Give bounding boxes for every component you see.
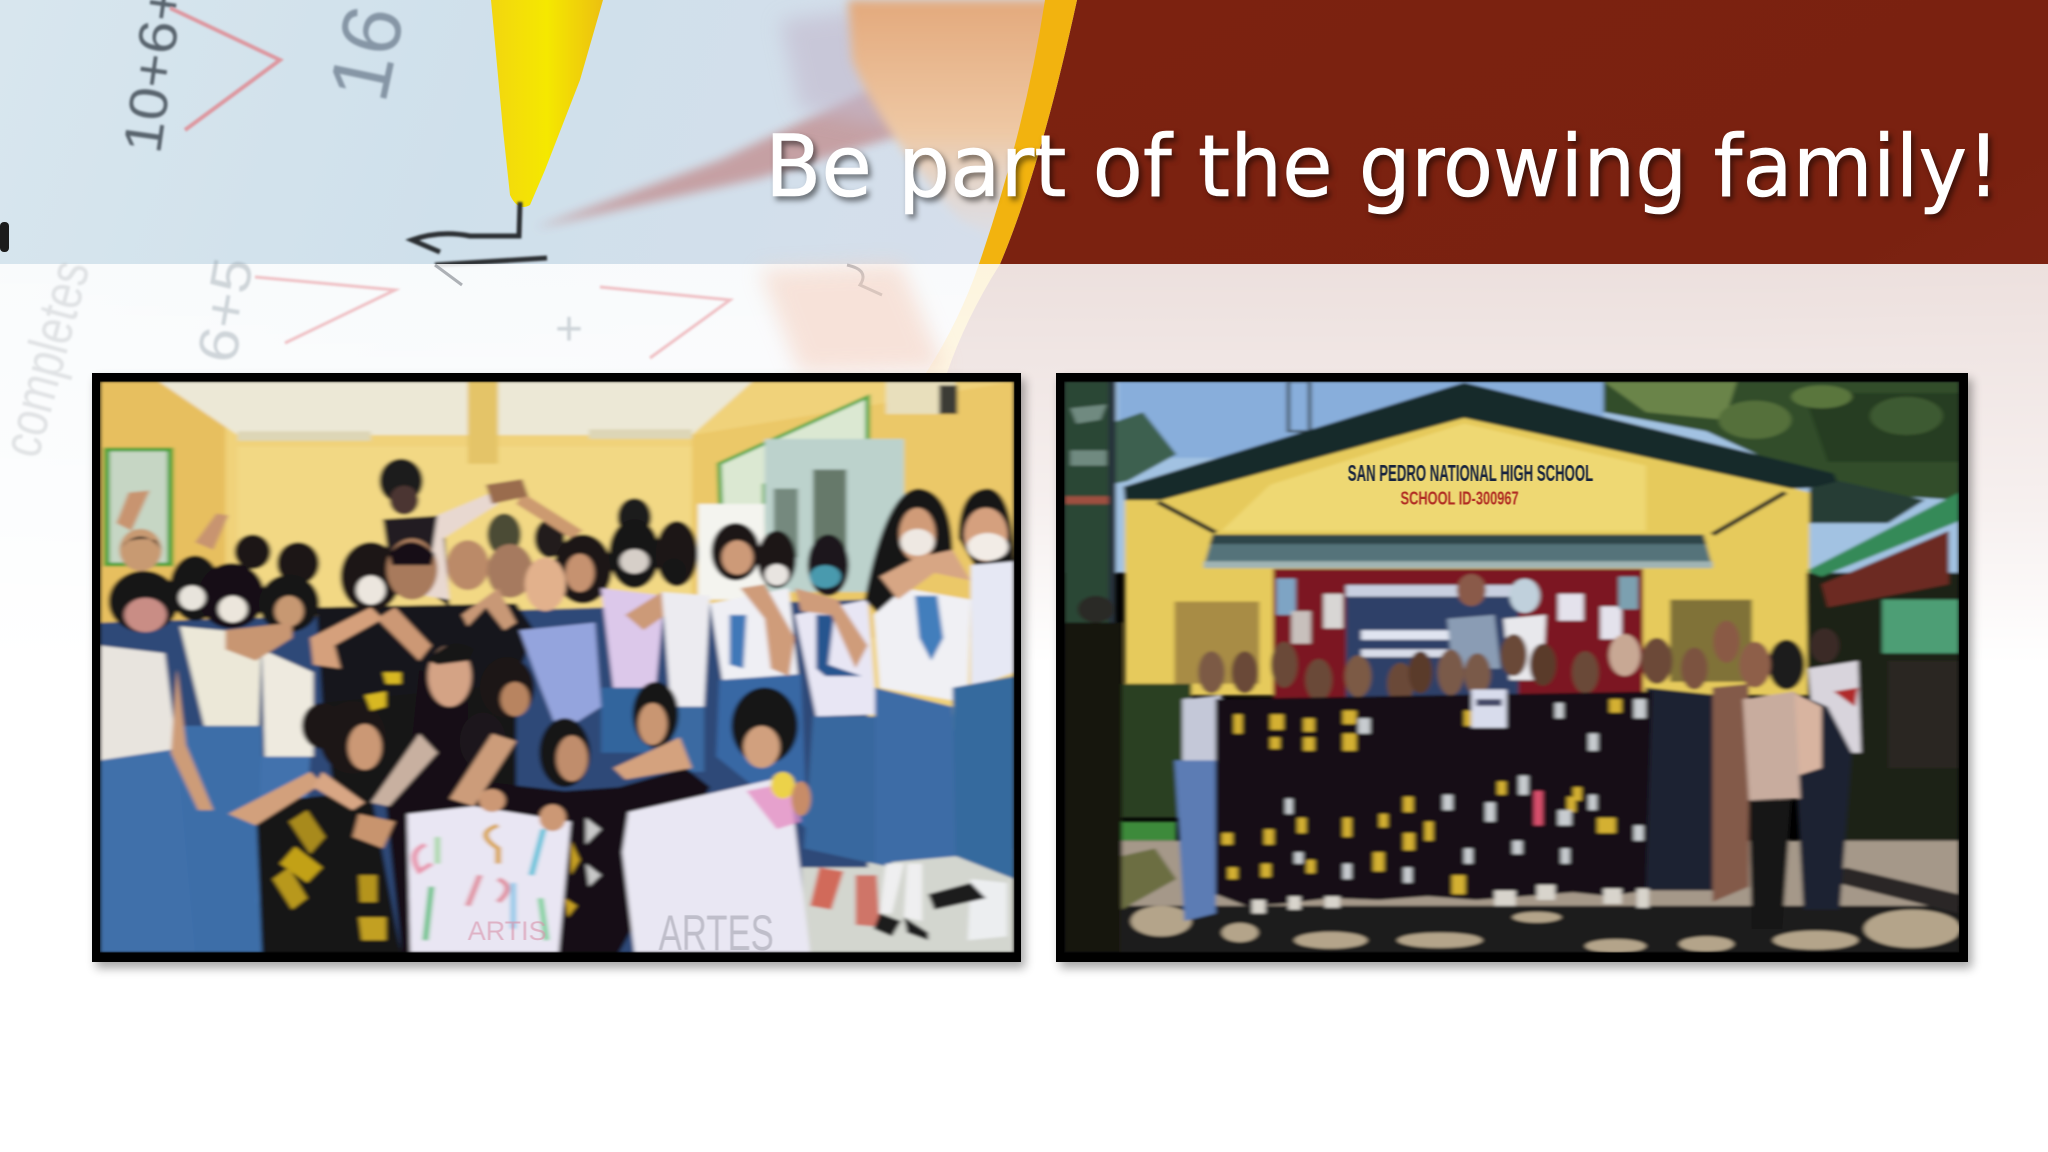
costume patches bbox=[1222, 699, 1622, 894]
back row heads bbox=[379, 459, 423, 503]
right girl bbox=[959, 489, 1014, 569]
faded lower marks bbox=[0, 253, 583, 463]
photo: school building with students in front: SAN PEDRO NATIONAL HIGH SCHOOL bbox=[1348, 461, 1593, 486]
photo: students making heart signs in a classroom bbox=[100, 381, 1014, 960]
crowd base fill bbox=[100, 600, 868, 952]
poster left bbox=[407, 806, 571, 952]
white fade overlay bbox=[0, 264, 2048, 664]
blue mask girl bbox=[808, 535, 849, 596]
arms bbox=[228, 772, 322, 825]
faded lower marks: + bbox=[555, 303, 583, 356]
finger bbox=[848, 0, 1060, 240]
worksheet marks: 16 bbox=[311, 0, 422, 109]
worksheet marks bbox=[112, 0, 422, 157]
banner bbox=[1346, 585, 1519, 700]
red stage wall bbox=[1273, 569, 1643, 699]
faded finger bbox=[760, 264, 945, 373]
white shirt tie mask bbox=[656, 521, 698, 586]
poster left lettering: ARTIS bbox=[468, 916, 547, 946]
background figures on stage bbox=[1457, 574, 1486, 606]
photo frame right bbox=[1056, 373, 1968, 962]
left window bbox=[107, 450, 170, 564]
air conditioner bbox=[886, 381, 956, 414]
photo frame shadow left bbox=[96, 379, 1025, 968]
photo: students making heart signs in a classroom: ARTES bbox=[659, 904, 774, 960]
ceiling bbox=[159, 381, 753, 435]
floor bbox=[801, 848, 1014, 952]
tower bbox=[1288, 381, 1310, 431]
wall posters bbox=[1276, 579, 1296, 615]
roof bbox=[1124, 383, 1840, 500]
dark mark at left edge bbox=[0, 222, 9, 252]
poster right bbox=[622, 776, 810, 952]
tie girl bbox=[711, 523, 760, 580]
front black clothes bbox=[412, 670, 468, 782]
students heads bbox=[1198, 651, 1225, 693]
faded lower marks: 6+5 bbox=[185, 253, 265, 367]
left palms bbox=[1064, 381, 1110, 623]
building bbox=[1125, 406, 1809, 695]
photo: school building with students in front bbox=[1064, 381, 1961, 953]
right trees bbox=[1603, 381, 1959, 500]
cabinet and door bbox=[698, 504, 765, 600]
red check mark bbox=[170, 8, 280, 130]
finger shadow bbox=[535, 85, 900, 228]
lavender dress bbox=[525, 558, 566, 611]
background: faded math worksheet photo bbox=[0, 0, 2048, 664]
black shirts middle bbox=[316, 603, 534, 714]
white shirt girls left bbox=[170, 556, 221, 621]
photo: school building with students in front: SCHOOL ID-300967 bbox=[1401, 489, 1519, 509]
left post bbox=[1064, 623, 1122, 952]
title: Be part of the growing family! bbox=[765, 117, 2000, 217]
long hair girl bbox=[865, 489, 952, 615]
left girl bbox=[108, 571, 179, 632]
pencil lead and stroke bbox=[412, 202, 547, 265]
students bodies bbox=[1216, 691, 1652, 906]
hedge bbox=[1122, 684, 1191, 818]
pavement bbox=[1122, 841, 1959, 952]
purple shirt bbox=[609, 519, 660, 588]
pencil bbox=[491, 0, 603, 207]
faded checks bbox=[255, 277, 730, 358]
photo frame left bbox=[92, 373, 1021, 962]
awning bbox=[1203, 542, 1713, 564]
right window bbox=[719, 397, 868, 523]
gold curve bbox=[926, 0, 1077, 373]
sunlit pavement spots bbox=[1131, 906, 1961, 953]
yellow tape bbox=[289, 810, 325, 854]
teachers bbox=[1713, 621, 1740, 663]
photo frame shadow right bbox=[1060, 379, 1972, 968]
red band bbox=[900, 0, 2048, 660]
certificate bbox=[1471, 690, 1507, 728]
sky bbox=[1064, 381, 1959, 573]
right pavilion bbox=[1806, 573, 1959, 875]
faded strokes bbox=[435, 265, 882, 295]
lattice walls bbox=[1175, 602, 1259, 684]
